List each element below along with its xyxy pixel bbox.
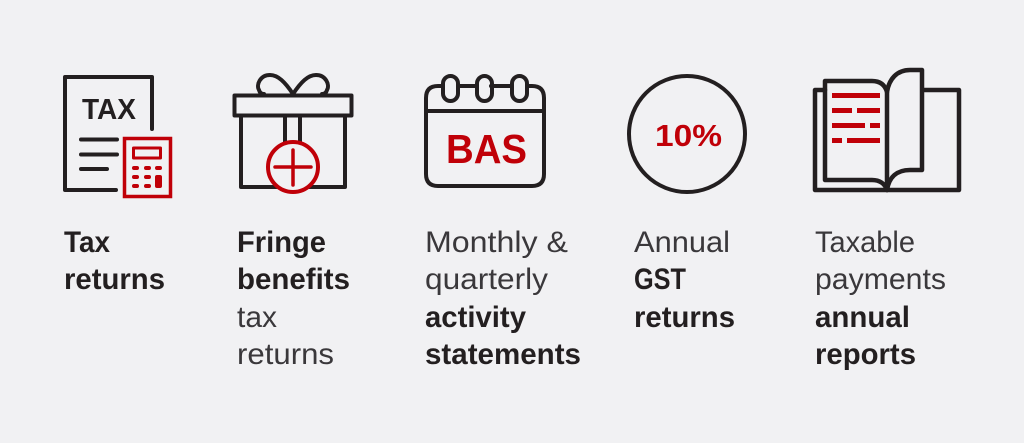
label: monthly and quarterly activity statements: activity	[425, 301, 527, 334]
label: taxable payments annual reports: reports	[815, 338, 916, 371]
label: taxable payments annual reports: annual	[815, 301, 910, 334]
label: annual GST returns	[634, 226, 735, 334]
icon: tax document with calculator	[65, 77, 170, 196]
icon: tax document with calculator: TAX	[82, 94, 137, 126]
panel: taxable payments annual reports	[815, 70, 959, 371]
panel: fringe benefits tax returns	[234, 75, 352, 371]
label: annual GST returns: GST	[634, 263, 686, 296]
label: monthly and quarterly activity statements: statements	[425, 338, 581, 371]
label: fringe benefits tax returns	[237, 226, 350, 371]
panel: tax returns	[64, 77, 170, 296]
label: monthly and quarterly activity statements: Monthly &	[425, 226, 568, 259]
icon: BAS calendar	[426, 76, 544, 186]
icon: open book	[815, 70, 959, 190]
label: tax returns: Tax	[64, 226, 111, 259]
label: fringe benefits tax returns: benefits	[237, 263, 350, 296]
icon: gift box with plus	[234, 75, 352, 192]
label: monthly and quarterly activity statements	[425, 226, 581, 371]
icon: 10% circle: 10%	[655, 118, 722, 153]
label: fringe benefits tax returns: Fringe	[237, 226, 326, 259]
label: annual GST returns: Annual	[634, 226, 730, 259]
icon: BAS calendar: BAS	[446, 126, 527, 172]
label: fringe benefits tax returns: tax	[237, 301, 277, 334]
icon: 10% circle	[629, 76, 745, 192]
label: monthly and quarterly activity statements: quarterly	[425, 263, 548, 296]
label: tax returns	[64, 226, 165, 296]
label: annual GST returns: returns	[634, 301, 735, 334]
label: fringe benefits tax returns: returns	[237, 338, 334, 371]
label: taxable payments annual reports: payments	[815, 263, 946, 296]
label: taxable payments annual reports: Taxable	[815, 226, 915, 259]
label: taxable payments annual reports	[815, 226, 946, 371]
label: tax returns: returns	[64, 263, 165, 296]
panel: activity statements	[425, 76, 581, 371]
panel: annual GST returns	[629, 76, 745, 334]
